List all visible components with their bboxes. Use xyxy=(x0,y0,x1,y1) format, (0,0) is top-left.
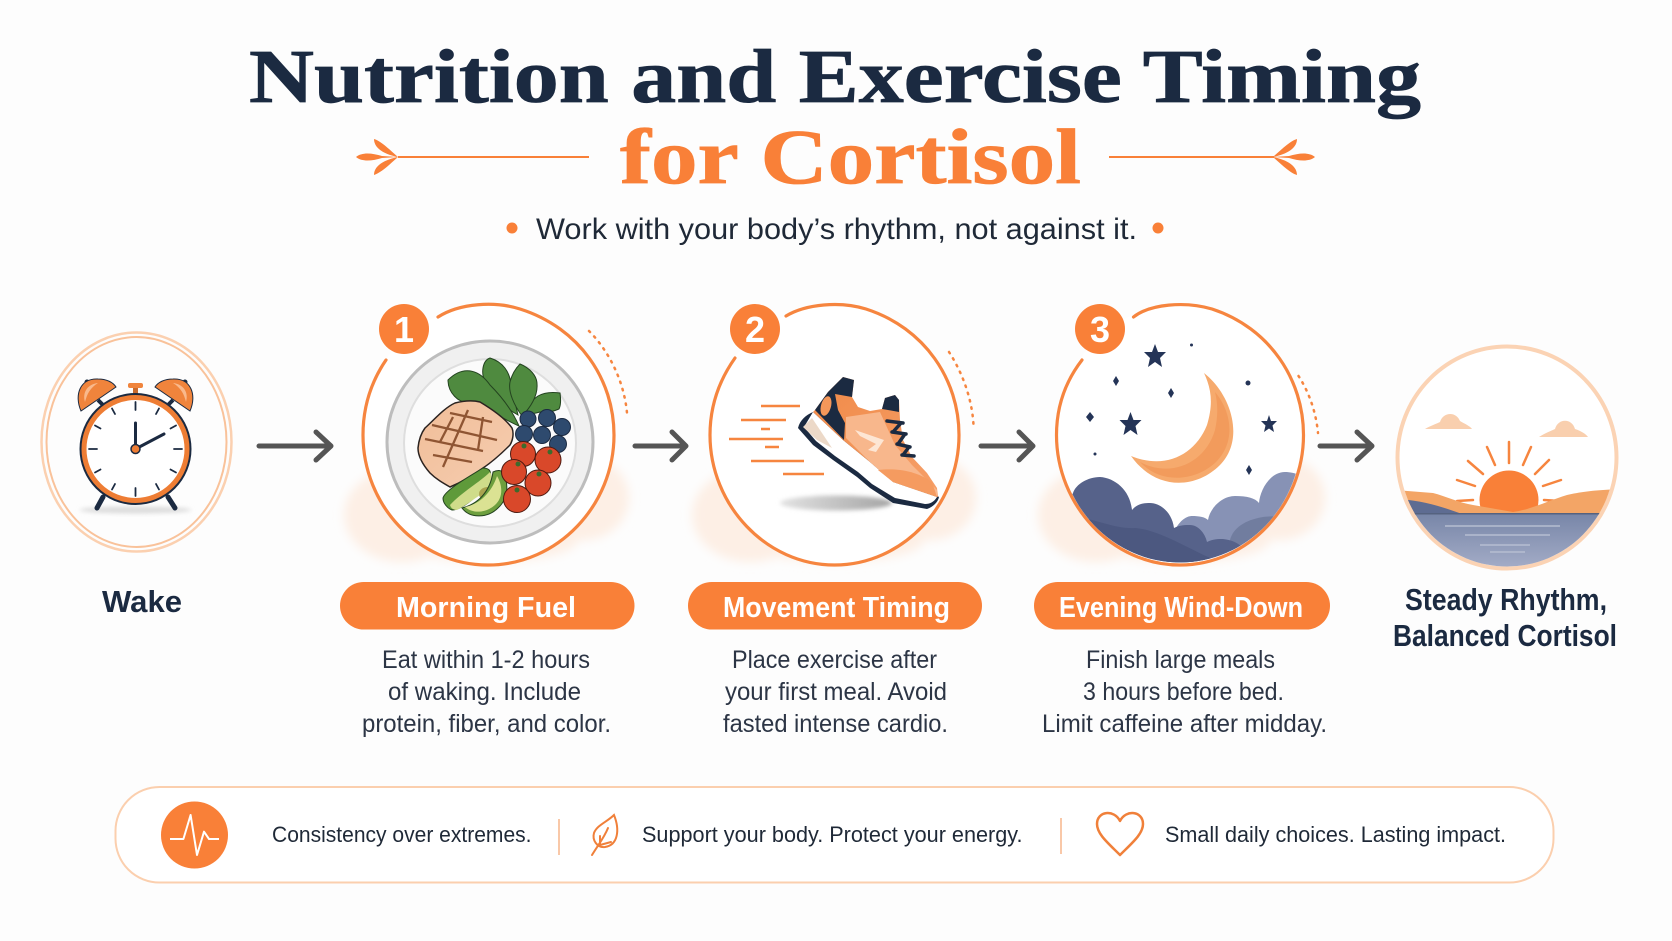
right flourish xyxy=(1109,139,1315,175)
icon: pulse xyxy=(161,802,228,868)
clouds xyxy=(1072,472,1296,562)
grilled chicken xyxy=(418,401,513,487)
badge 3 xyxy=(1075,304,1125,354)
left flourish xyxy=(356,139,589,175)
text: step 3 description: Finish large meals xyxy=(1086,646,1275,674)
ring 2 xyxy=(710,305,974,565)
arrow 2 xyxy=(635,432,686,460)
upper xyxy=(813,377,938,497)
ground shadow xyxy=(780,496,892,510)
text: step 1 description: of waking. Include xyxy=(388,678,581,706)
pill: Evening Wind-Down: Evening Wind-Down xyxy=(1059,592,1303,624)
logo stripe xyxy=(855,430,884,452)
text: small daily choices: Small daily choices. Lasting impact. xyxy=(1165,822,1506,847)
panel: step 1 morning fuel xyxy=(344,304,629,565)
pill: Evening Wind-Down xyxy=(1034,582,1330,630)
soft backdrop 3 xyxy=(1038,456,1325,562)
ring 3 xyxy=(1056,305,1318,565)
text: step 2 description: Place exercise after xyxy=(732,646,937,674)
icon: plate of food xyxy=(387,341,593,543)
text: step 3 description: 3 hours before bed. xyxy=(1083,678,1284,706)
icon: running shoe xyxy=(780,377,939,510)
leaves xyxy=(448,358,561,426)
badge 1: 1 xyxy=(394,309,414,350)
icon: moon xyxy=(1131,373,1233,483)
tomatoes xyxy=(502,442,561,512)
pill: Movement Timing: Movement Timing xyxy=(723,592,950,624)
badge 1 xyxy=(379,304,429,354)
arrow 4 xyxy=(1320,432,1372,460)
laces xyxy=(887,421,914,456)
text: step 3 description: Limit caffeine after midday. xyxy=(1042,710,1327,738)
text: step 1 description: protein, fiber, and color. xyxy=(362,710,611,738)
pill: Movement Timing xyxy=(688,582,982,630)
text: step 1 description xyxy=(362,646,611,738)
outsole xyxy=(798,412,939,509)
icon: sunrise xyxy=(1395,346,1620,574)
text: support: Support your body. Protect your energy. xyxy=(642,822,1022,847)
pill: Morning Fuel xyxy=(340,582,634,630)
arrow 1 xyxy=(259,432,331,460)
icon: heart xyxy=(1097,813,1143,855)
label: Steady Rhythm, Balanced Cortisol: Balanced Cortisol xyxy=(1393,618,1617,653)
icon: leaf xyxy=(592,815,617,855)
pill: Morning Fuel: Morning Fuel xyxy=(396,592,576,624)
text: consistency: Consistency over extremes. xyxy=(272,822,532,847)
text: step 2 description xyxy=(723,646,948,738)
text: step 2 description: fasted intense cardio. xyxy=(723,710,948,738)
text: step 1 description: Eat within 1-2 hours xyxy=(382,646,590,674)
text: step 3 description xyxy=(1042,646,1327,738)
light panels xyxy=(846,412,937,497)
ring 1 xyxy=(362,304,627,565)
title: Nutrition and Exercise Timing xyxy=(249,35,1421,119)
label: Steady Rhythm, Balanced Cortisol xyxy=(1393,582,1617,653)
panel: step 2 movement timing xyxy=(692,304,976,565)
stars xyxy=(1086,344,1277,475)
soft backdrop 2 xyxy=(692,456,976,562)
panel: bottom banner xyxy=(116,787,1554,882)
speed lines xyxy=(729,406,824,474)
blueberries xyxy=(516,410,570,452)
label: Wake: Wake xyxy=(102,584,182,619)
soft backdrop 1 xyxy=(344,456,629,562)
icon: wake clock xyxy=(42,332,232,552)
midsole xyxy=(804,412,937,504)
panel: step 3 evening wind-down xyxy=(1038,304,1325,590)
label: Steady Rhythm, Balanced Cortisol: Steady Rhythm, xyxy=(1405,582,1607,617)
avocado xyxy=(443,468,507,516)
tagline: Work with your body’s rhythm, not against it. xyxy=(536,213,1137,246)
badge 2 xyxy=(730,304,780,354)
text: step 2 description: your first meal. Avoid xyxy=(725,678,947,706)
arrow 3 xyxy=(981,432,1033,460)
navy heel xyxy=(815,377,854,440)
subtitle: for Cortisol: for Cortisol xyxy=(620,113,1081,200)
badge 2: 2 xyxy=(745,309,765,350)
badge 3: 3 xyxy=(1090,309,1110,350)
